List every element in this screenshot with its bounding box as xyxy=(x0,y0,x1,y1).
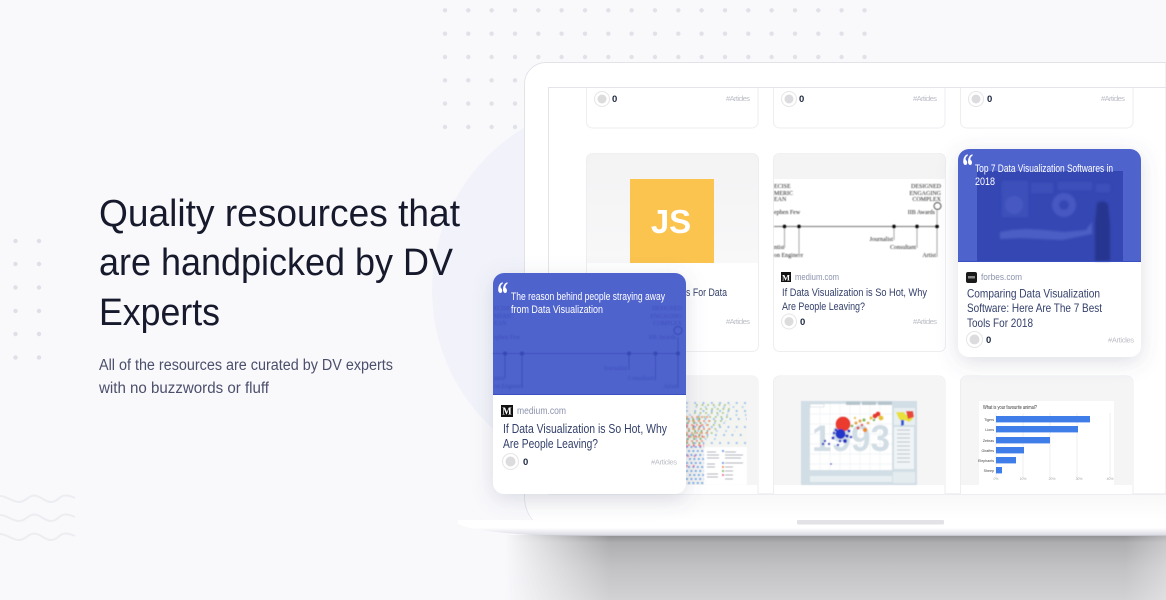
card row 1: card 3: #Articles xyxy=(1101,94,1125,103)
timeline chart thumbnail: on Engineer xyxy=(774,253,803,259)
faint timeline chart: IIB Awards xyxy=(649,335,677,341)
decorative dot grid: left xyxy=(13,239,41,360)
title: are handpicked by DV xyxy=(99,242,454,284)
card: JavaScript article: #Articles xyxy=(726,317,750,326)
bubble chart: 1993 xyxy=(812,418,890,459)
faint timeline chart: ntist xyxy=(494,376,505,382)
faint timeline chart: Consultant xyxy=(628,376,654,382)
icon: medium logo: M xyxy=(502,406,512,418)
card: medium article: Are People Leaving? xyxy=(782,301,865,313)
highlighted card: Top 7 Data Visualization Softwares: Software: Here Are The 7 Best xyxy=(967,301,1103,315)
bar chart: Zebras xyxy=(983,439,994,443)
icon: forbes logo xyxy=(966,272,977,283)
decorative waves xyxy=(0,496,75,540)
background circle xyxy=(432,101,810,479)
faint timeline chart: ephen Few xyxy=(494,335,521,341)
highlighted card: Top 7 Data Visualization Softwares: Top 7 Data Visualization Softwares in xyxy=(975,163,1113,175)
timeline chart thumbnail: DESIGNED xyxy=(911,184,942,190)
bar chart: Tigers xyxy=(984,418,994,422)
icon: medium logo xyxy=(501,405,513,418)
card row 1: card 1: 0 xyxy=(612,94,617,105)
card: medium article: medium.com xyxy=(795,272,839,283)
highlighted card: people straying away xyxy=(493,273,686,494)
timeline chart thumbnail: IIB Awards xyxy=(908,210,936,216)
highlighted card: Top 7 Data Visualization Softwares: Tools For 2018 xyxy=(967,316,1033,330)
timeline chart thumbnail: MERIC xyxy=(774,191,793,197)
faint timeline chart: on Engineer xyxy=(494,384,523,390)
timeline chart thumbnail: Artist xyxy=(922,253,936,259)
card: Gapminder thumbnail xyxy=(774,376,945,494)
bubble chart xyxy=(801,401,917,485)
card: map thumbnail xyxy=(676,376,758,494)
card row 1: card 2: 0 xyxy=(799,94,804,105)
highlighted card: Top 7 Data Visualization Softwares: #Articles xyxy=(1108,336,1134,344)
timeline chart thumbnail: ECISE xyxy=(774,184,791,190)
timeline chart thumbnail: ntist xyxy=(774,245,785,251)
faint timeline chart: ENGAGING xyxy=(650,314,683,320)
highlighted card: people straying away: medium.com xyxy=(517,405,566,417)
card: medium article: If Data Visualization is So Hot, Why xyxy=(782,287,927,299)
highlighted card: Top 7 Data Visualization Softwares: 0 xyxy=(986,335,991,346)
bar chart xyxy=(978,401,1114,485)
faint timeline chart: EAN xyxy=(494,321,507,327)
highlighted card: people straying away: 0 xyxy=(523,457,528,468)
decorative dot grid: top xyxy=(443,8,867,129)
title xyxy=(99,193,460,334)
subtitle text: with no buzzwords or fluff xyxy=(98,380,270,397)
highlighted card: people straying away: The reason behind people straying away xyxy=(511,291,665,303)
bar chart: What is your favourite animal? xyxy=(983,405,1037,411)
highlighted card: people straying away: Are People Leaving? xyxy=(503,437,598,451)
bar chart: 10% xyxy=(1020,477,1026,481)
title: Quality resources that xyxy=(99,193,460,235)
laptop base xyxy=(458,520,1166,536)
card row 1: card 2 xyxy=(774,88,945,128)
faint timeline chart xyxy=(493,306,683,390)
subtitle text: All of the resources are curated by DV experts xyxy=(99,357,393,374)
quote mark: “ xyxy=(496,274,508,314)
card row 1: card 3: 0 xyxy=(987,94,992,105)
timeline chart thumbnail: EAN xyxy=(774,197,787,203)
laptop notch xyxy=(797,520,944,524)
timeline chart thumbnail: COMPLEX xyxy=(912,197,942,203)
highlighted card: Top 7 Data Visualization Softwares: forbes.com xyxy=(981,272,1022,283)
bar chart: Elephants xyxy=(978,459,994,463)
highlighted card: people straying away: from Data Visualization xyxy=(511,304,603,316)
scatter map xyxy=(686,401,747,485)
faint timeline chart: Journalist xyxy=(604,366,627,372)
quote mark: “ xyxy=(961,146,973,186)
card: JavaScript article xyxy=(586,154,758,352)
card row 1: card 2: #Articles xyxy=(913,94,937,103)
icon: JS logo xyxy=(630,179,714,263)
faint timeline chart: Artist xyxy=(663,384,677,390)
timeline chart thumbnail: Consultant xyxy=(890,245,916,251)
highlighted card: people straying away: If Data Visualization is So Hot, Why xyxy=(503,422,668,436)
bar chart: Sheep xyxy=(984,469,994,473)
subtitle text xyxy=(98,357,393,397)
card: JavaScript article: s For Data xyxy=(686,287,728,299)
card: medium article xyxy=(774,154,946,352)
timeline chart thumbnail: ephen Few xyxy=(774,210,801,216)
icon: medium logo: M xyxy=(782,272,790,282)
bar chart: 30% xyxy=(1076,477,1082,481)
card: medium article: 0 xyxy=(800,317,805,328)
map legend xyxy=(704,447,747,485)
faint timeline chart: MERIC xyxy=(494,314,513,320)
laptop shadow xyxy=(505,535,1166,600)
faint timeline chart: ECISE xyxy=(494,306,511,312)
timeline chart thumbnail: Journalist xyxy=(870,237,893,243)
dark dashboard image xyxy=(977,171,1123,261)
card: medium article: #Articles xyxy=(913,317,937,326)
timeline chart thumbnail xyxy=(774,184,942,259)
highlighted card: Top 7 Data Visualization Softwares: 2018 xyxy=(975,176,995,188)
highlighted card: people straying away: #Articles xyxy=(651,458,677,466)
icon: JS logo: JS xyxy=(651,203,691,240)
card row 1: card 1 xyxy=(586,88,758,128)
card row 1: card 1: #Articles xyxy=(726,94,750,103)
bar chart: Lions xyxy=(985,428,994,432)
faint timeline chart: COMPLEX xyxy=(653,321,683,327)
title: Experts xyxy=(99,292,220,334)
bar chart: 40% xyxy=(1107,477,1113,481)
card: animal bar chart thumbnail xyxy=(960,376,1133,494)
timeline chart thumbnail: ENGAGING xyxy=(909,191,942,197)
highlighted card: Top 7 Data Visualization Softwares: Comparing Data Visualization xyxy=(967,286,1100,300)
bar chart: 0% xyxy=(994,477,998,481)
bar chart: Giraffes xyxy=(981,449,994,453)
highlighted card: Top 7 Data Visualization Softwares xyxy=(958,146,1141,357)
laptop screen xyxy=(524,62,1166,521)
faint timeline chart: DESIGNED xyxy=(652,306,683,312)
card row 1: card 3 xyxy=(960,88,1133,128)
bar chart: 20% xyxy=(1049,477,1055,481)
